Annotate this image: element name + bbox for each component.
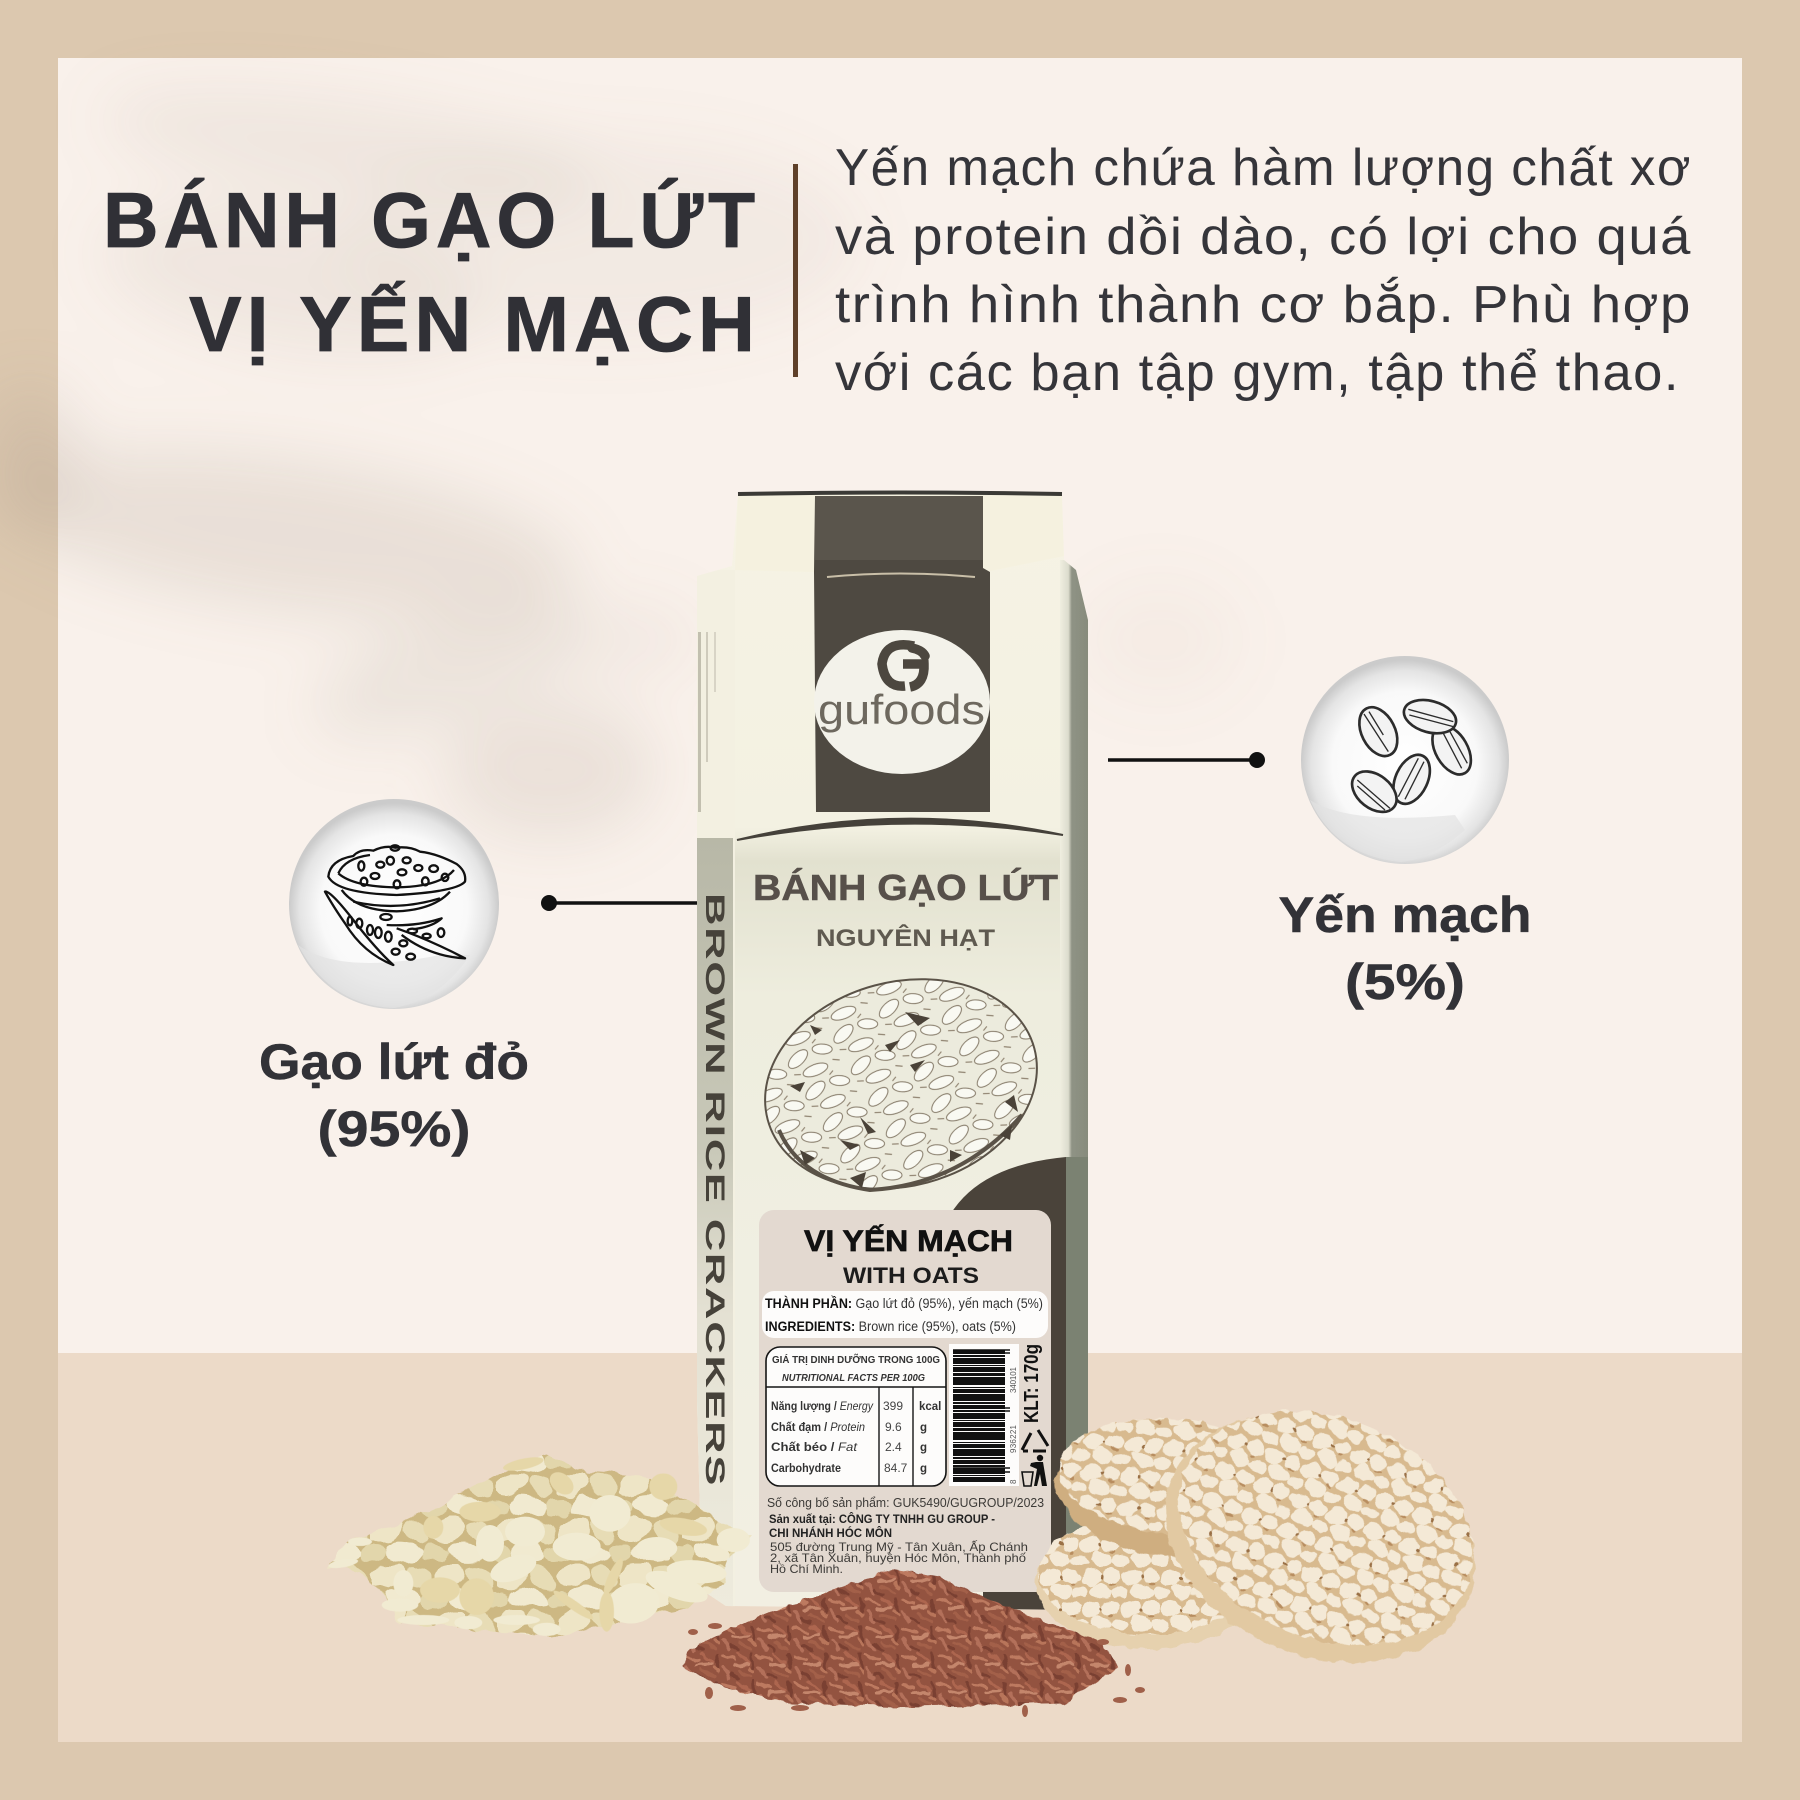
bag neck shading — [735, 494, 1064, 572]
description text — [835, 139, 1692, 402]
ingredients box — [762, 1291, 1048, 1338]
product label card — [759, 1210, 1051, 1592]
legal text: 505 đường Trung Mỹ - Tân Xuân, Ấp Chánh — [770, 1539, 1028, 1554]
title: BÁNH GẠO LỨT — [103, 176, 760, 264]
crackers — [1036, 1369, 1513, 1707]
nutrition table: g — [920, 1442, 927, 1454]
net weight: KLT: 170g — [1021, 1344, 1043, 1423]
nutrition table: 399 — [883, 1399, 903, 1413]
nutrition table: Carbohydrate — [771, 1463, 841, 1475]
label: brown rice: Gạo lứt đỏ — [259, 1034, 529, 1090]
bag subheading: NGUYÊN HẠT — [816, 924, 995, 952]
nutrition table: Chất béo / Fat — [771, 1442, 858, 1454]
barcode — [949, 1344, 1019, 1486]
logo oval — [814, 630, 990, 774]
right gusset — [1060, 560, 1088, 1157]
label flavor english: WITH OATS — [843, 1263, 979, 1288]
nutrition table: Chất đạm / Protein — [771, 1422, 865, 1434]
icon: recycling — [1022, 1430, 1048, 1451]
title — [103, 176, 760, 368]
nutrition table: 9.6 — [885, 1420, 902, 1434]
nutrition table: Năng lượng / Energy — [771, 1401, 874, 1413]
vertical divider — [793, 164, 798, 377]
nutrition table — [766, 1347, 946, 1486]
bag heading: BÁNH GẠO LỨT — [753, 866, 1058, 908]
nutrition table: kcal — [919, 1401, 941, 1413]
legal text: 2, xã Tân Xuân, huyện Hóc Môn, Thành phố — [770, 1551, 1026, 1565]
nutrition table: GIÁ TRỊ DINH DƯỠNG TRONG 100G — [772, 1353, 940, 1366]
legal text: CHI NHÁNH HÓC MÔN — [769, 1527, 892, 1540]
nutrition table: NUTRITIONAL FACTS PER 100G — [782, 1373, 925, 1384]
red rice pile — [683, 1570, 1145, 1717]
dark logo band — [814, 496, 990, 812]
icon: oat grains in sphere — [1301, 656, 1509, 864]
icon: trash man — [1022, 1455, 1047, 1486]
legal text: Sản xuất tại: CÔNG TY TNHH GU GROUP - — [769, 1513, 995, 1526]
label: oats: Yến mạch — [1278, 887, 1532, 943]
label: brown rice: (95%) — [318, 1101, 470, 1157]
curved seal line — [737, 819, 1063, 840]
ingredients box: INGREDIENTS: Brown rice (95%), oats (5%) — [765, 1319, 1016, 1334]
label: oats: (5%) — [1345, 954, 1465, 1010]
barcode: 936221 — [1009, 1424, 1018, 1453]
rice cake illustration — [741, 950, 1061, 1218]
legal text: Hồ Chí Minh. — [770, 1562, 843, 1576]
nutrition table: 2.4 — [885, 1440, 902, 1454]
bottom left cracker — [1036, 1514, 1260, 1649]
product bag — [690, 490, 1090, 1615]
description text: và protein dồi dào, có lợi cho quá — [835, 208, 1692, 266]
left gusset — [697, 632, 735, 1520]
description text: trình hình thành cơ bắp. Phù hợp — [835, 276, 1692, 334]
icon: brown rice bowl in sphere — [289, 799, 499, 1009]
description text: Yến mạch chứa hàm lượng chất xơ — [835, 139, 1692, 197]
legal text — [767, 1496, 1044, 1576]
oat flakes pile — [328, 1454, 750, 1637]
dark lower corner shape — [950, 1157, 1066, 1610]
nutrition table: 84.7 — [884, 1461, 908, 1475]
nutrition table: g — [920, 1463, 927, 1475]
logo wordmark: gufoods — [818, 686, 985, 733]
barcode: 340101 — [1009, 1366, 1018, 1393]
callout line: brown rice — [541, 895, 697, 911]
legal text: Số công bố sản phẩm: GUK5490/GUGROUP/2023 — [767, 1496, 1044, 1510]
large cracker — [1127, 1369, 1513, 1707]
ingredients box: THÀNH PHẦN: Gạo lứt đỏ (95%), yến mạch (5%) — [765, 1296, 1043, 1311]
logo mark: G — [882, 645, 925, 687]
title: VỊ YẾN MẠCH — [189, 280, 760, 368]
description text: với các bạn tập gym, tập thể thao. — [835, 344, 1680, 402]
label: brown rice — [259, 1034, 529, 1157]
label: oats — [1278, 887, 1532, 1010]
side text: BROWN RICE CRACKERS — [700, 893, 730, 1487]
top left cracker — [1050, 1408, 1302, 1570]
bag top edge — [738, 492, 1062, 494]
callout line: oats — [1108, 752, 1265, 768]
barcode: 8 — [1009, 1479, 1018, 1484]
label flavor title: VỊ YẾN MẠCH — [804, 1224, 1013, 1258]
nutrition table: g — [920, 1422, 927, 1434]
